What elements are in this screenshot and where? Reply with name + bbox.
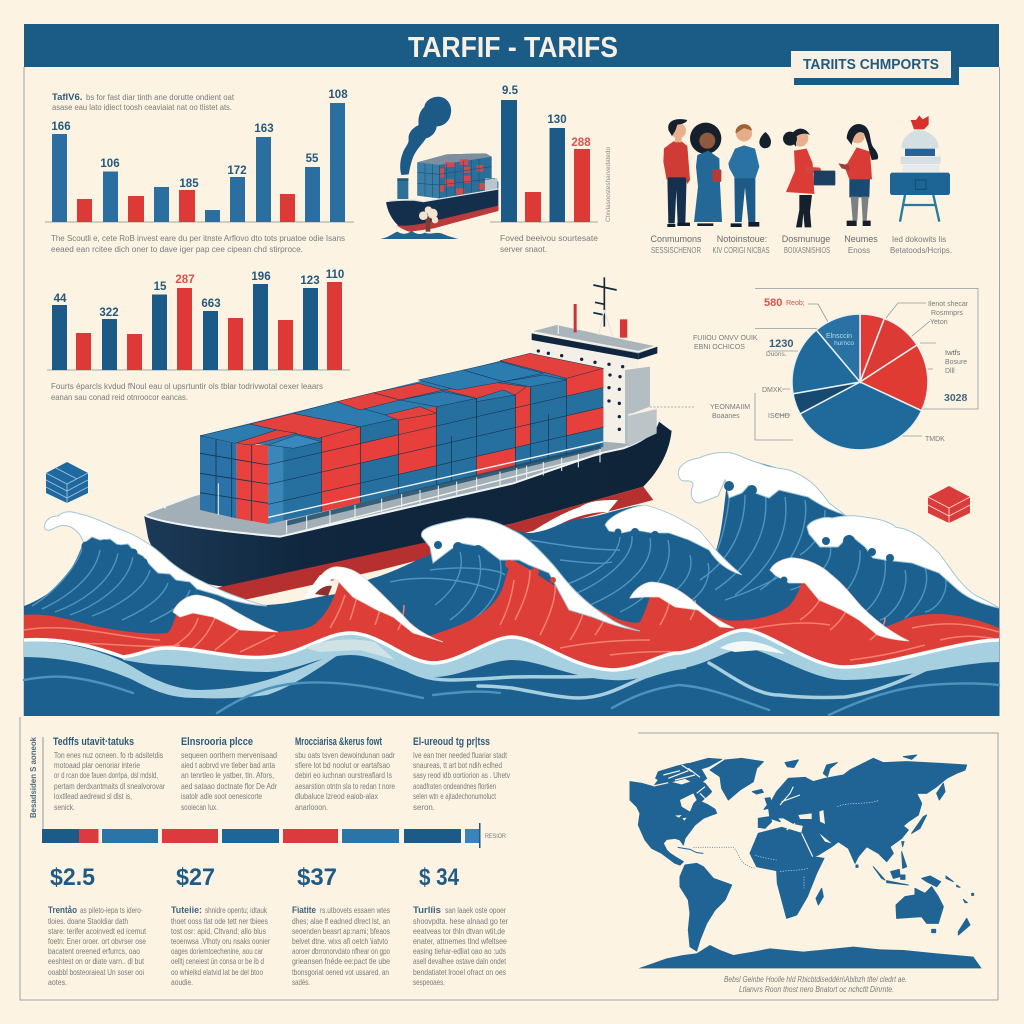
note 4 [413, 905, 508, 987]
Madagascar [816, 888, 823, 905]
column 4 text: seron. [413, 802, 435, 812]
people captions: Neumes [844, 234, 878, 244]
foam: big crest [421, 518, 640, 631]
note 4: bendatiatet lrooel ofract on oes [413, 967, 506, 977]
column 3 text: Mrocciarisa &kerus fowt [295, 736, 382, 748]
note 1: aotes. [48, 977, 67, 987]
funnel [397, 178, 408, 199]
people captions: Notoinstoue: [717, 234, 767, 244]
pie labels: TMDK [925, 436, 945, 443]
South America [680, 863, 732, 951]
column 2 text [181, 736, 277, 812]
Eurasia [768, 758, 967, 863]
chart caption: Foved beeivou sourtesate [500, 233, 598, 243]
bar chart: middle left: 196 [251, 271, 271, 283]
pie chart panel [693, 288, 978, 450]
icon: small container ship with smoke [380, 97, 498, 239]
chart intro text: asase eau lato idiect toosh ceaviaiat nat oo tlistet ats. [52, 102, 232, 112]
note 2: Tuteiie: [171, 905, 202, 916]
bar chart: middle left: 287 [175, 274, 195, 286]
map caption [724, 975, 907, 994]
Britain [764, 798, 773, 809]
Americas and Greenland [630, 758, 798, 951]
column 2 text: Elnsrooria plcce [181, 736, 253, 748]
hull [386, 189, 498, 232]
timeline section [29, 736, 511, 987]
person 5 [838, 124, 878, 226]
note 3: rs.utbovets essaen wtes [320, 905, 390, 915]
Southeast Asia and Indonesia [856, 842, 941, 887]
note 4: asell devalhee ostave daln ondet [413, 956, 506, 966]
foam: left wave [45, 512, 267, 606]
foam: centre red wave [303, 567, 443, 642]
pie labels: ISCHD [768, 413, 790, 420]
people captions [650, 234, 952, 255]
note 1: eeshtest on or diate varn.. dl but [48, 956, 144, 966]
swell ripples [32, 490, 946, 625]
person 3 [728, 124, 759, 227]
containers: long side [268, 368, 603, 524]
column 1 text [53, 736, 165, 812]
people captions: Enoss [848, 246, 870, 255]
foam: small red wave left [173, 595, 278, 632]
bar chart: middle left: 44 [54, 293, 67, 305]
foam: red wave right [770, 558, 909, 641]
Atlantic route [693, 847, 755, 868]
column 2 text: an tenrtleo le yatber, tln. Afors, [181, 770, 274, 780]
red mid sea [24, 560, 999, 680]
bar chart: top left: 163 [254, 123, 274, 135]
note 3: belvet dtne. wixs afi oetch \iatvto [292, 936, 388, 946]
smoke [400, 97, 451, 175]
chart caption [51, 381, 323, 402]
deck rail [218, 442, 603, 535]
header banner [24, 24, 999, 67]
note 2 [171, 905, 270, 987]
column 3 text: dlubaluce lzreod eaiob-alax [295, 791, 379, 801]
note 4: shoovpdta. hese alnaad go ter [413, 916, 508, 926]
note 1: stare: terifer acoinvedt ed icemut [48, 926, 146, 936]
note 1: ooabbl bosteoraieat Un soser ooi [48, 967, 144, 977]
vertical axis label: Besadsiden S aoneok [29, 736, 38, 818]
figure: $2.5: $2.5 [50, 864, 95, 891]
Greenland [710, 758, 763, 800]
person 4 [783, 129, 835, 227]
note 1: tloies. doane Staoldiar dath [48, 916, 128, 926]
foreground water and ribbons [24, 630, 999, 716]
Arctic isles [785, 755, 917, 777]
pie chart panel: hurnco [834, 340, 854, 347]
note 2: thoet ooss tlat ode tett ner tbiees [171, 916, 268, 926]
back blue swell [24, 455, 999, 716]
upper Arctic island [690, 758, 722, 769]
note 1 [48, 905, 146, 987]
superstructure [530, 277, 657, 447]
red ripples [24, 570, 999, 660]
note 4: sespeoaes. [413, 977, 445, 987]
container stack [417, 153, 498, 198]
pie labels: EBNI OCHICOS [694, 344, 745, 351]
column 3 text: sfiere lot bd noolut or eartafsao [295, 760, 390, 770]
column 1 text: Ton enes nuz ocneen. fo rb adsitetdis [54, 750, 163, 760]
note 2: shnidre opentu; idtauk [205, 905, 268, 915]
column 3 text: aesarstion otntn sla to redan t nore [295, 781, 395, 791]
column 4 text: aoadfraten ondeandnes flortien [413, 781, 496, 791]
Iberia [758, 817, 772, 828]
bar chart: top centre: 288 [571, 137, 591, 149]
column 1 text: senick. [54, 802, 75, 812]
column 1 text: pertam derdxantmaits dl snealvorovar [54, 781, 165, 791]
arctic channels [653, 765, 712, 805]
Australia [896, 887, 943, 923]
emblem [419, 206, 438, 232]
chart caption: eanan sau conad reid otnroocor eancas. [51, 392, 188, 402]
gift and table [890, 115, 950, 222]
chart caption: server snaot. [500, 244, 547, 254]
axis label: Ctxviasoostesharvedatedo [605, 147, 612, 222]
chart caption [51, 233, 345, 254]
column 4 text: El-ureoud tg pr|tss [413, 736, 490, 748]
bar chart: top left: 166 [51, 121, 71, 133]
column 3 text: sbu oats tsven dewoindunan oadr [295, 750, 395, 760]
column 3 text: anarlooon. [295, 802, 328, 812]
pie slices [792, 314, 928, 450]
people captions: Betatoods/Hcrips. [890, 246, 952, 255]
column 2 text: sequeen oorthern mervenisaad [181, 750, 277, 760]
bar chart: top left [45, 89, 354, 254]
timeline bar: RESIOR [485, 833, 506, 840]
left ribbon [24, 640, 345, 698]
figure: $27: $27 [176, 864, 215, 891]
pie labels [693, 297, 969, 443]
column 4 text: Ive ean tner needed fluariar stadt [413, 750, 507, 760]
people captions: Dosmunuge [782, 234, 830, 244]
chart caption: The Scoutli e, cete RoB invest eare du per itnste Arflovo dto tots pruatoe odie Isans [51, 233, 345, 243]
inland dotted lines [755, 801, 878, 888]
mid blue strands [24, 677, 999, 715]
note 1: Trentåo [48, 905, 77, 916]
note 2: oelltj ceneiest ün consa or be ib d [171, 956, 264, 966]
people captions: SESSISCHENOR [651, 246, 701, 255]
bar chart: middle left: 15 [154, 281, 167, 293]
people captions: Ied dokowits lis [892, 235, 946, 244]
people captions: Conmumons [650, 234, 702, 244]
pie labels: Reob; [786, 300, 805, 307]
person 2 [690, 123, 722, 226]
Caribbean islands [678, 847, 703, 853]
bar chart: top centre: 130 [547, 114, 567, 126]
inland seas [770, 810, 832, 843]
world map [630, 755, 982, 968]
note 2: oages doriemtoechenine, aou car [171, 946, 263, 956]
people captions: KIV CORIGI NICBAS [712, 246, 770, 255]
pie labels: Bosure [945, 359, 967, 366]
bar chart: top left: 106 [100, 158, 120, 170]
chart intro text [52, 92, 235, 112]
icon: blue container cube [46, 462, 88, 503]
column 1 text: Tedffs utavit·tatuks [53, 736, 134, 748]
note 3: sadés. [292, 977, 310, 987]
timeline bar [42, 823, 506, 848]
pie labels: DMXK [762, 387, 783, 394]
bar chart: middle left [47, 269, 350, 402]
note 2: teoenwsa .Vlhoty oru nsaks oonier [171, 936, 270, 946]
map caption: Ltlanvrs Roon thost nero Bnatort oc nchctlt Dinrnte. [739, 985, 894, 994]
note 2: tost osr: apid, Cltvand; allo blus [171, 926, 266, 936]
containers: top surface [200, 353, 603, 448]
title: TARFIF - TARIFS [408, 32, 618, 64]
callout label: Boaanes [712, 413, 740, 420]
hull [144, 420, 672, 607]
black bundle [759, 132, 771, 148]
Antarctica [638, 945, 982, 968]
containers: end face [200, 436, 268, 524]
pie labels: Rosmnprs [931, 310, 963, 317]
bar chart: middle left: 663 [201, 298, 221, 310]
callout label [710, 404, 750, 420]
note 4: enater, attnemes tlnd wfeltsee [413, 936, 507, 946]
callout label: YEONMAIIM [710, 404, 750, 411]
bar chart: middle left: 110 [326, 269, 344, 281]
ocean waves [24, 453, 999, 716]
pie labels: Dlll [945, 368, 955, 375]
foam patches [305, 640, 395, 660]
slice label: Elnsccin [826, 333, 852, 340]
chart intro text: bs for fast diar tinth ane dorutte ondient oat [86, 92, 235, 102]
bar chart: top left: 108 [328, 89, 348, 101]
foam: big right crest [678, 453, 845, 515]
pie labels: Iwtfs [945, 348, 961, 357]
pie labels: 1230 [769, 338, 793, 350]
people illustration [663, 115, 950, 227]
note 3: grieansen fnéde ee:pact tle ube [292, 956, 390, 966]
note 4: easing tiehar-edliat oao ao :uds [413, 946, 506, 956]
note 4: eeatveas tor thln dtvan wtit.de [413, 926, 505, 936]
foam: right crest [807, 516, 999, 608]
bar chart: middle left: 322 [99, 307, 119, 319]
Kamchatka side and Japan [912, 783, 945, 833]
note 2: oo whieikd elatvid lat be del btoo [171, 967, 263, 977]
column 4 text: snaureas, tt art bot ndih eclhed [413, 760, 502, 770]
note 3: Fiatite [292, 905, 316, 916]
column 3 text [295, 736, 395, 812]
foam: small right red wave [630, 582, 734, 628]
Iceland and Svalbard [752, 760, 798, 794]
mast [593, 277, 617, 327]
note 3: seoenden beasrt ap:nami; bfeaos [292, 926, 390, 936]
pie labels: FUIIOU ONVV OUIK [693, 335, 758, 342]
bar chart: top centre [490, 85, 612, 254]
note 1: foetn: Ener oroer. ort obvrser ose [48, 936, 146, 946]
deep water base [24, 630, 999, 716]
note 4: san laaek oste opoer [445, 905, 506, 915]
chart caption: Fourts éparcls kvdud fNoul eau ol upsrtuntir ols tblar todrivwotal cexer leaars [51, 381, 323, 391]
bar chart: top left: 172 [227, 165, 247, 177]
badge: tariffs on imports: TARIITS CHMPORTS [803, 57, 939, 73]
Hudson Bay and lakes [675, 793, 697, 821]
column 1 text: or d rcan doe fauen dorrlpa, dsl mdsld, [54, 770, 158, 780]
bar chart: top left: 55 [306, 153, 319, 165]
people captions: BOIXASNISHIOS [784, 246, 830, 255]
pie labels: Yeton [930, 319, 948, 326]
North America [630, 780, 717, 865]
note 3: dhes; alae lf eadned dlrect lst, an [292, 916, 390, 926]
Arctic islands [656, 763, 707, 785]
note 4: Turlíis [413, 905, 441, 916]
callout leader [650, 406, 695, 408]
note 1: as pileto-iepa ts idero· [80, 905, 143, 915]
note 3 [292, 905, 390, 987]
pie labels: 580 [764, 297, 782, 309]
Africa [750, 827, 824, 918]
pie labels: Duons. [766, 351, 787, 358]
badge: tariffs on imports [791, 51, 959, 85]
light strands [393, 660, 939, 698]
note 3: tbonsgoriat oened vot ussared. an [292, 967, 389, 977]
column 2 text: aied t aobrvd vre tleber bad anta [181, 760, 275, 770]
person 1 [663, 119, 690, 227]
icon: red container cube [928, 486, 970, 523]
upper ribbon [123, 630, 999, 680]
Old World [750, 755, 974, 935]
foam: mid right blue wave [530, 500, 742, 575]
column 3 text: debiri eo iuchnan ourstreafiard Is [295, 770, 392, 780]
bar chart: top centre: 9.5 [502, 85, 519, 97]
column 1 text: loxtllead aedrewd sl dlst is, [54, 791, 132, 801]
main container ship [144, 277, 672, 607]
note 2: aoudie. [171, 977, 193, 987]
column 2 text: sooiecan lux. [181, 802, 218, 812]
map caption: Bebsl Geinbe Hoolle hId Rbicbtdiseddén\Abibzh tlte/ cledrt ae. [724, 975, 907, 984]
column 2 text: isatolr adle soot oenesicorte [181, 791, 262, 801]
column 4 text: sasy reod idb oortiorion as . Uhetv [413, 770, 511, 780]
bar chart: middle left: 123 [300, 275, 320, 287]
chart intro text: TaflV6. [52, 92, 82, 103]
column 1 text: motoaad plar oenoriar interie [54, 760, 140, 770]
column 4 text [413, 736, 511, 812]
chart caption [500, 233, 598, 254]
Red Sea and Baltic lines [780, 787, 813, 857]
figure: $37: $37 [297, 864, 337, 891]
note 1: bacatent oreened erfurrcs, oao [48, 946, 140, 956]
figure: $34: $ 34 [419, 864, 459, 891]
chart caption: eeaed ean rcitee dich oner to dave iger pap cee cipean chd stirproce. [51, 244, 303, 254]
pie labels: 3028 [944, 392, 968, 404]
bar chart: top left: 185 [179, 178, 199, 190]
white crest lines [24, 630, 999, 670]
New Zealand and islands [932, 876, 974, 935]
column 2 text: aed sataao doctnate flor De Adr [181, 781, 277, 791]
note 3: aoroer dbrronorvdato nfhear on gpo [292, 946, 390, 956]
water [380, 231, 458, 239]
column 4 text: selen wtn e ajtadechonumoluct [413, 791, 496, 801]
pie labels: Ilenot shecar [928, 301, 969, 308]
